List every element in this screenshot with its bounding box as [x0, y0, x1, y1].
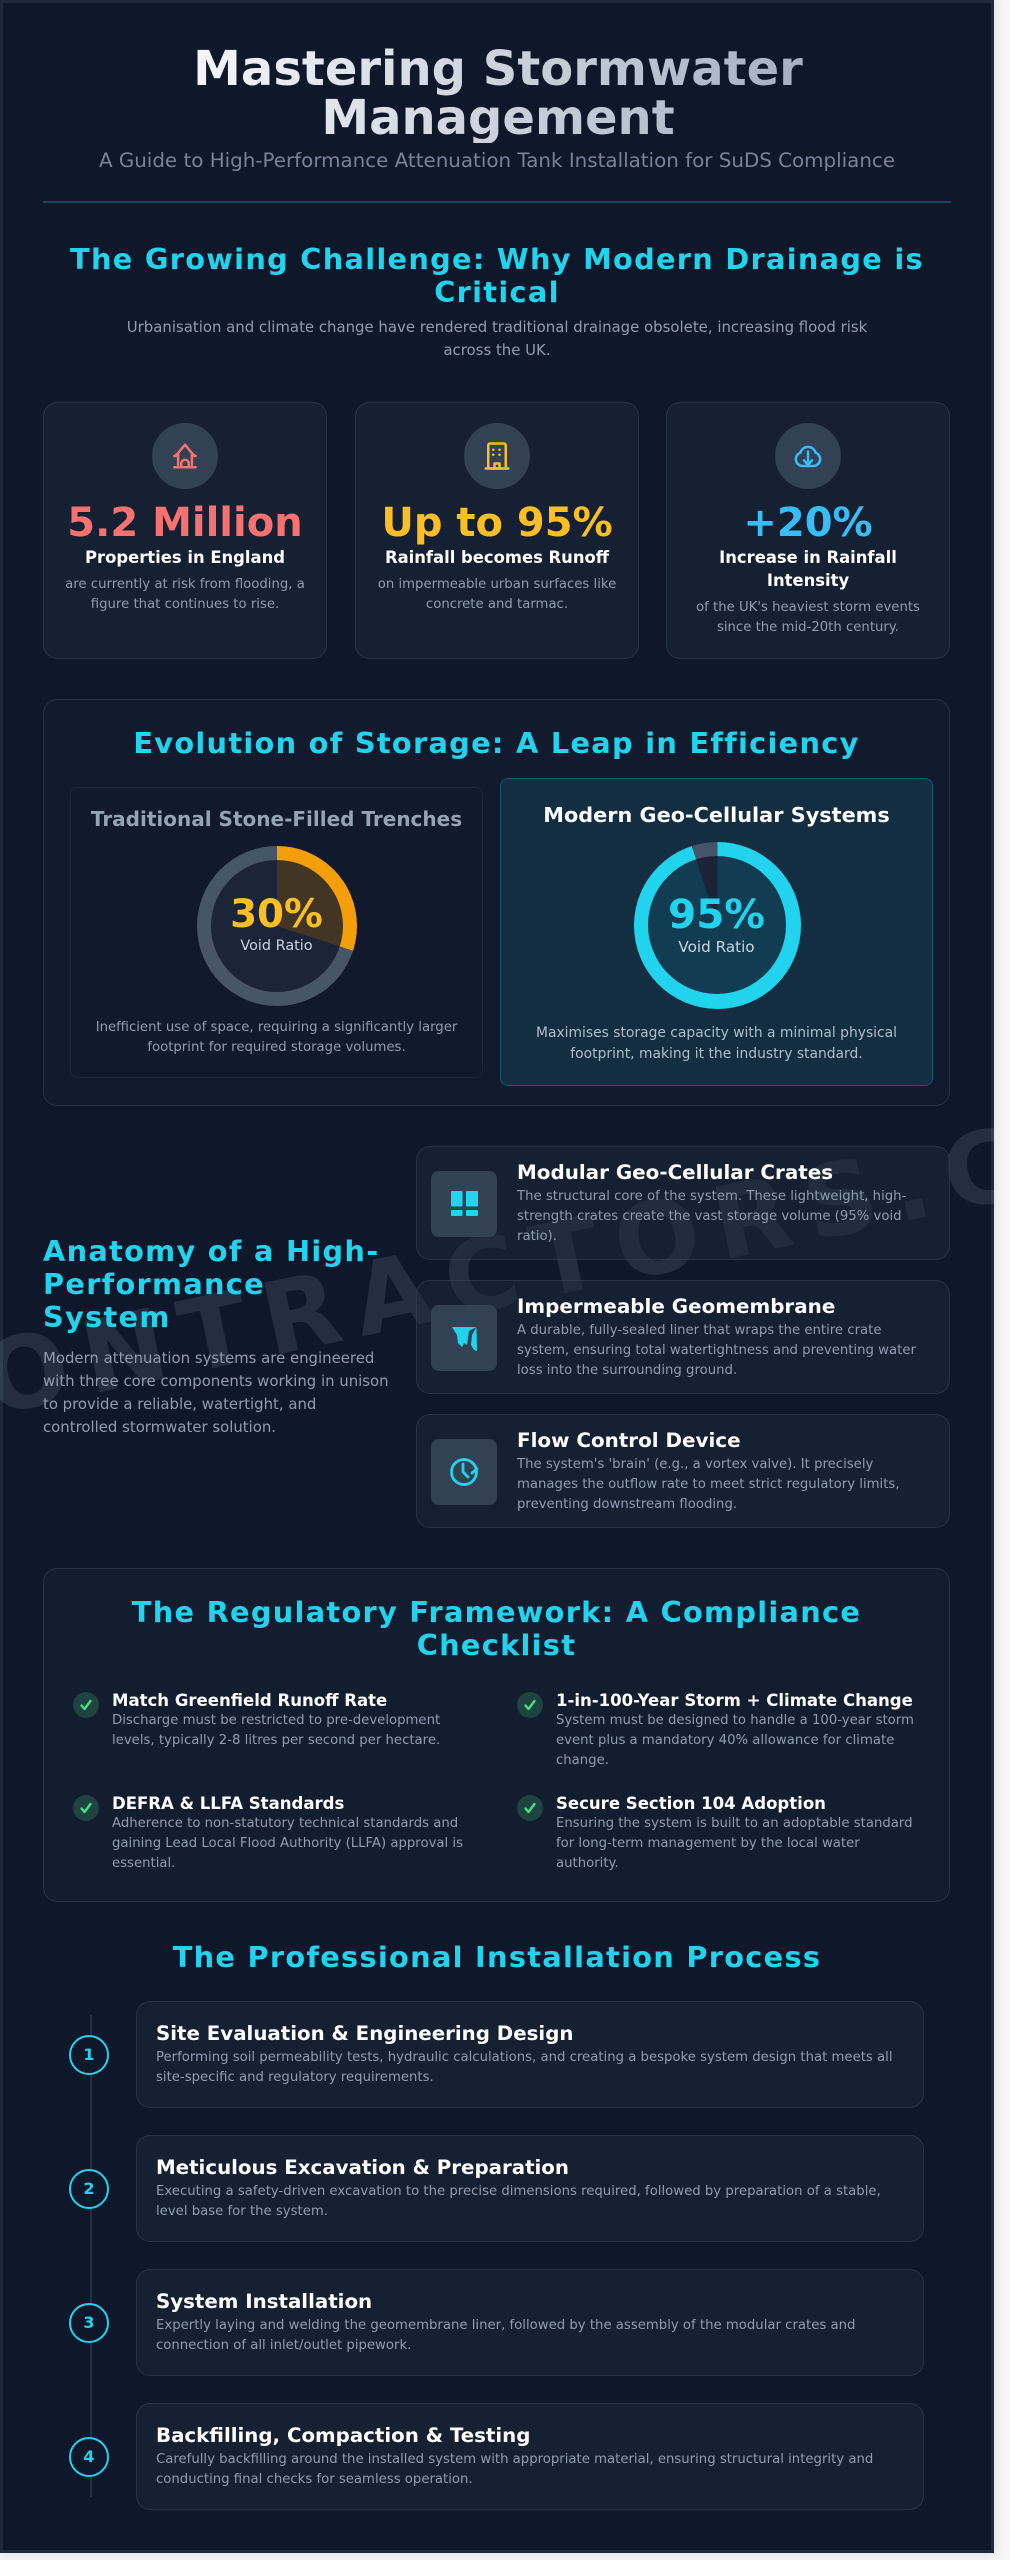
- header divider: [43, 201, 951, 203]
- component description: loss into the surrounding ground.: [517, 1363, 737, 1378]
- stat description: [696, 600, 920, 635]
- section intro text: [127, 318, 868, 359]
- item title: DEFRA & LLFA Standards: [112, 1794, 344, 1812]
- section heading: The Regulatory Framework: A Compliance: [132, 1595, 861, 1629]
- intro paragraph: controlled stormwater solution.: [43, 1418, 276, 1436]
- step description: [156, 2184, 881, 2219]
- item description: Ensuring the system is built to an adoptable standard: [556, 1816, 912, 1831]
- item description: System must be designed to handle a 100-year storm: [556, 1713, 914, 1728]
- stat description: [378, 577, 616, 612]
- step title: Backfilling, Compaction & Testing: [156, 2424, 530, 2447]
- component card: geomembrane: [416, 1280, 950, 1394]
- step description: connection of all inlet/outlet pipework.: [156, 2338, 411, 2353]
- step description: Executing a safety-driven excavation to the precise dimensions required, followed by preparation of a stable,: [156, 2184, 881, 2199]
- section heading: Checklist: [417, 1628, 576, 1662]
- step number: 3: [83, 2313, 95, 2332]
- component title: Impermeable Geomembrane: [517, 1295, 835, 1318]
- step card: [136, 2001, 924, 2108]
- step 3: [69, 2269, 924, 2376]
- stat number: +20%: [743, 500, 873, 546]
- section heading: System: [43, 1300, 171, 1334]
- void ratio value: 30%: [230, 892, 323, 937]
- step description: site-specific and regulatory requirements.: [156, 2070, 434, 2085]
- item description: levels, typically 2-8 litres per second per hectare.: [112, 1733, 440, 1748]
- component description: A durable, fully-sealed liner that wraps the entire crate: [517, 1323, 882, 1338]
- title: Mastering Stormwater: [193, 41, 803, 97]
- section intro text: Urbanisation and climate change have rendered traditional drainage obsolete, increasing flood risk: [127, 318, 867, 336]
- icon: crates: [431, 1171, 497, 1237]
- step description: Expertly laying and welding the geomembrane liner, followed by the assembly of the modular crates and: [156, 2318, 855, 2333]
- section heading: [132, 1595, 861, 1662]
- intro paragraph: [43, 1349, 389, 1436]
- step card: [136, 2269, 924, 2376]
- item title: 1-in-100-Year Storm + Climate Change: [556, 1690, 913, 1710]
- section intro text: across the UK.: [443, 341, 551, 359]
- component description: preventing downstream flooding.: [517, 1497, 737, 1512]
- donut chart: 95%: [634, 842, 800, 1008]
- step number: 2: [83, 2179, 95, 2198]
- step description: Performing soil permeability tests, hydraulic calculations, and creating a bespoke system design that meets all: [156, 2050, 893, 2065]
- step title: Site Evaluation & Engineering Design: [156, 2022, 573, 2045]
- step title: Meticulous Excavation & Preparation: [156, 2156, 569, 2179]
- icon: valve: [431, 1439, 497, 1505]
- comparison description: footprint, making it the industry standard.: [570, 1046, 863, 1062]
- stat label: Rainfall becomes Runoff: [385, 548, 609, 567]
- stat description: of the UK's heaviest storm events: [696, 600, 920, 615]
- stat description: figure that continues to rise.: [91, 597, 279, 612]
- stat description: concrete and tarmac.: [426, 597, 568, 612]
- step description: [156, 2452, 873, 2487]
- item description: Adherence to non-statutory technical standards and: [112, 1816, 458, 1831]
- checklist item: greenfield: [73, 1690, 440, 1748]
- item description: change.: [556, 1753, 609, 1768]
- step card: [136, 2403, 924, 2510]
- check icon: [73, 1795, 99, 1821]
- panel: evolution of storage: [43, 699, 950, 1106]
- step number: [69, 2035, 109, 2075]
- title: [193, 45, 803, 143]
- stat description: are currently at risk from flooding, a: [65, 577, 305, 592]
- step description: [156, 2050, 893, 2085]
- section heading: [43, 1234, 379, 1334]
- anatomy intro: [43, 1234, 389, 1436]
- item title: Match Greenfield Runoff Rate: [112, 1690, 387, 1710]
- panel: traditional trenches: [70, 787, 483, 1078]
- comparison description: [536, 1025, 897, 1062]
- step description: [156, 2318, 855, 2353]
- comparison description: footprint for required storage volumes.: [147, 1040, 406, 1055]
- checklist item: storm: [517, 1690, 914, 1768]
- icon: membrane: [431, 1305, 497, 1371]
- stat number: 5.2 Million: [67, 500, 303, 546]
- component description: strength crates create the vast storage volume (95% void: [517, 1209, 902, 1224]
- checklist item: section 104: [517, 1794, 912, 1871]
- section heading: the growing challenge: The Growing Challenge: Why Modern Drainage is: [70, 242, 924, 276]
- component card: crates: [416, 1146, 950, 1260]
- section heading: installation process: The Professional Installation Process: [173, 1940, 821, 1974]
- donut centre: [648, 856, 786, 994]
- stat number: Up to 95%: [381, 500, 613, 546]
- component description: The structural core of the system. These lightweight, high-: [517, 1189, 906, 1204]
- step description: level base for the system.: [156, 2204, 328, 2219]
- donut centre: [211, 860, 343, 992]
- comparison description: [96, 1020, 458, 1055]
- stat label: [719, 548, 897, 590]
- title: Management: [321, 90, 675, 146]
- item title: Secure Section 104 Adoption: [556, 1794, 826, 1812]
- panel: modern geo-cellular: [500, 778, 933, 1086]
- component card: flow control: [416, 1414, 950, 1528]
- void ratio label: Void Ratio: [678, 938, 755, 956]
- component description: The system's 'brain' (e.g., a vortex valve). It precisely: [517, 1457, 873, 1472]
- item description: Discharge must be restricted to pre-development: [112, 1713, 440, 1728]
- subtitle: A Guide to High-Performance Attenuation Tank Installation for SuDS Compliance: [99, 149, 895, 172]
- item description: gaining Lead Local Flood Authority (LLFA) approval is: [112, 1836, 463, 1851]
- comparison title: Traditional Stone-Filled Trenches: [91, 807, 462, 831]
- intro paragraph: Modern attenuation systems are engineered: [43, 1349, 374, 1367]
- section heading: the growing challenge: Critical: [434, 275, 560, 309]
- stat description: on impermeable urban surfaces like: [378, 577, 616, 592]
- section heading: the growing challenge: [70, 242, 924, 309]
- component description: [517, 1323, 916, 1378]
- item description: for long-term management by the local water: [556, 1836, 860, 1851]
- stat label: Increase in Rainfall: [719, 548, 897, 567]
- component title: Flow Control Device: [517, 1429, 741, 1452]
- void ratio value: 95%: [668, 890, 765, 938]
- step number: [69, 2169, 109, 2209]
- section heading: Anatomy of a High-: [43, 1234, 379, 1268]
- item description: essential.: [112, 1856, 175, 1871]
- icon: building: [464, 423, 530, 489]
- component title: Modular Geo-Cellular Crates: [517, 1161, 833, 1184]
- component description: [516, 1189, 906, 1244]
- component description: system, ensuring total watertightness and preventing water: [517, 1343, 916, 1358]
- intro paragraph: to provide a reliable, watertight, and: [43, 1395, 316, 1413]
- section heading: Performance: [43, 1267, 265, 1301]
- item description: [112, 1816, 463, 1871]
- stat card: up to 95%: [355, 402, 639, 659]
- item description: [556, 1713, 914, 1768]
- item description: [556, 1816, 912, 1871]
- comparison title: Modern Geo-Cellular Systems: [543, 803, 890, 827]
- comparison description: Maximises storage capacity with a minimal physical: [536, 1025, 897, 1041]
- stat description: since the mid-20th century.: [717, 620, 899, 635]
- step title: System Installation: [156, 2290, 372, 2313]
- item description: authority.: [556, 1856, 619, 1871]
- step number: [69, 2303, 109, 2343]
- section heading: Evolution of Storage: A Leap in Efficiency: [133, 726, 860, 760]
- step number: [69, 2437, 109, 2477]
- step number: 4: [83, 2447, 95, 2466]
- donut chart: 30%: [197, 846, 357, 1006]
- stat description: [65, 577, 305, 612]
- item description: [112, 1713, 440, 1748]
- component description: manages the outflow rate to meet strict regulatory limits,: [517, 1477, 900, 1492]
- step description: conducting final checks for seamless operation.: [156, 2472, 473, 2487]
- item description: event plus a mandatory 40% allowance for climate: [556, 1733, 894, 1748]
- component description: [516, 1457, 900, 1512]
- check icon: [517, 1795, 543, 1821]
- component description: ratio).: [517, 1229, 557, 1244]
- icon: house: [152, 423, 218, 489]
- stat card: +20%: [666, 402, 950, 659]
- step card: [136, 2135, 924, 2242]
- comparison description: Inefficient use of space, requiring a significantly larger: [96, 1020, 457, 1035]
- check icon: [73, 1692, 99, 1718]
- header: [43, 41, 951, 203]
- stat label: Properties in England: [85, 548, 285, 567]
- check icon: [517, 1692, 543, 1718]
- step 4: [69, 2403, 924, 2510]
- panel: regulatory framework: [43, 1568, 950, 1902]
- void ratio label: Void Ratio: [240, 938, 313, 954]
- step description: Carefully backfilling around the installed system with appropriate material, ensuring structural integrity and: [156, 2452, 873, 2467]
- stat label: Intensity: [767, 571, 849, 590]
- intro paragraph: with three core components working in unison: [43, 1372, 389, 1390]
- step 1: [69, 2001, 924, 2108]
- stat card: 5.2 million: [43, 402, 327, 659]
- timeline line: [90, 2015, 92, 2497]
- step 2: [69, 2135, 924, 2242]
- checklist item: defra: [73, 1794, 463, 1871]
- icon: cloud download: [775, 423, 841, 489]
- step number: 1: [83, 2045, 95, 2064]
